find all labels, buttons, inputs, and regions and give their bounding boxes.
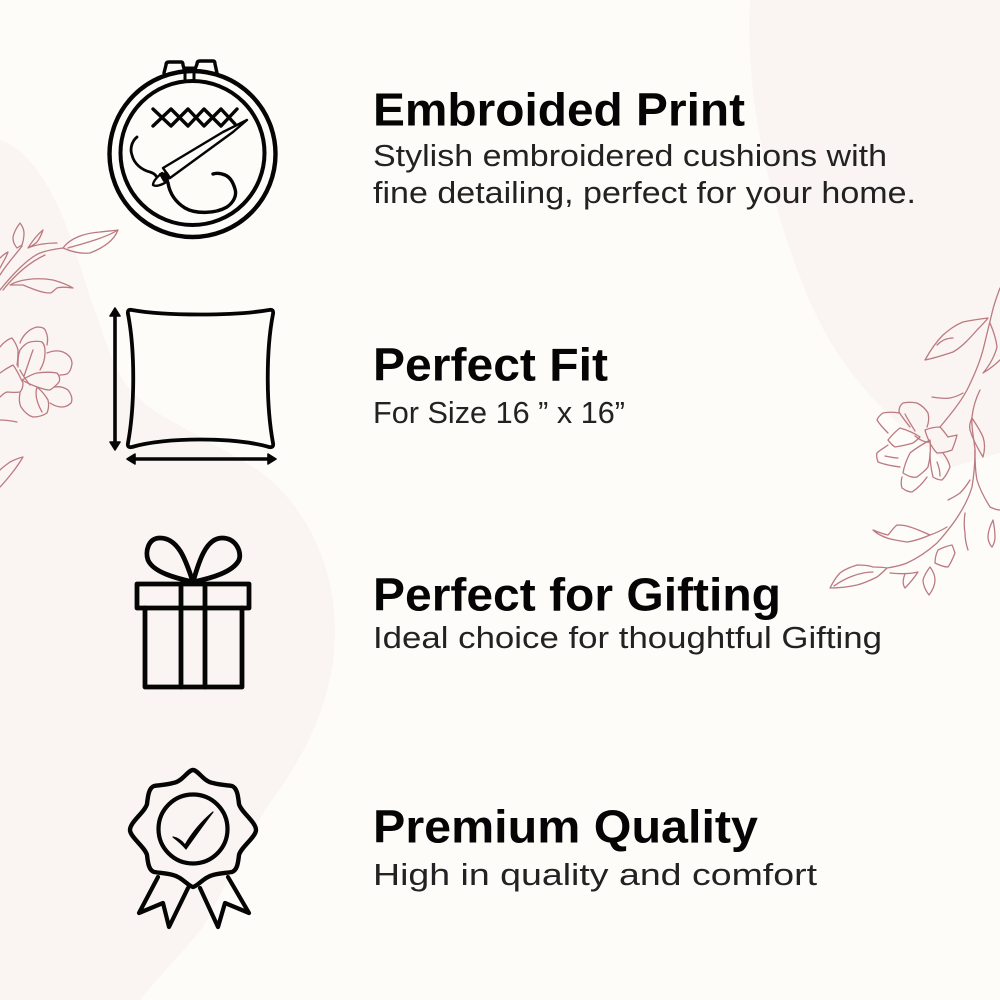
heading: Embroided Print: Embroided Print <box>373 84 745 136</box>
background blob: top right <box>749 0 1000 467</box>
text: embroidered description <box>373 138 916 210</box>
background blob: left <box>0 140 335 1000</box>
floral: left <box>0 223 118 487</box>
text: embroidered description: Stylish embroidered cushions with <box>373 138 887 173</box>
icon: gift box <box>137 538 249 687</box>
heading: Perfect Fit: Perfect Fit <box>373 338 608 390</box>
heading: Premium Quality: Premium Quality <box>373 800 758 852</box>
icon: quality badge <box>130 770 256 927</box>
text: size: For Size 16 ” x 16” <box>373 395 625 430</box>
text: gifting description: Ideal choice for thoughtful Gifting <box>373 620 882 655</box>
text: quality description: High in quality and comfort <box>373 857 817 892</box>
icon: cushion with size arrows <box>110 308 276 464</box>
floral: right <box>830 288 1000 595</box>
text: embroidered description: fine detailing, perfect for your home. <box>373 175 916 210</box>
icon: embroidery hoop <box>110 61 276 237</box>
heading: Perfect for Gifting: Perfect for Gifting <box>373 568 781 620</box>
